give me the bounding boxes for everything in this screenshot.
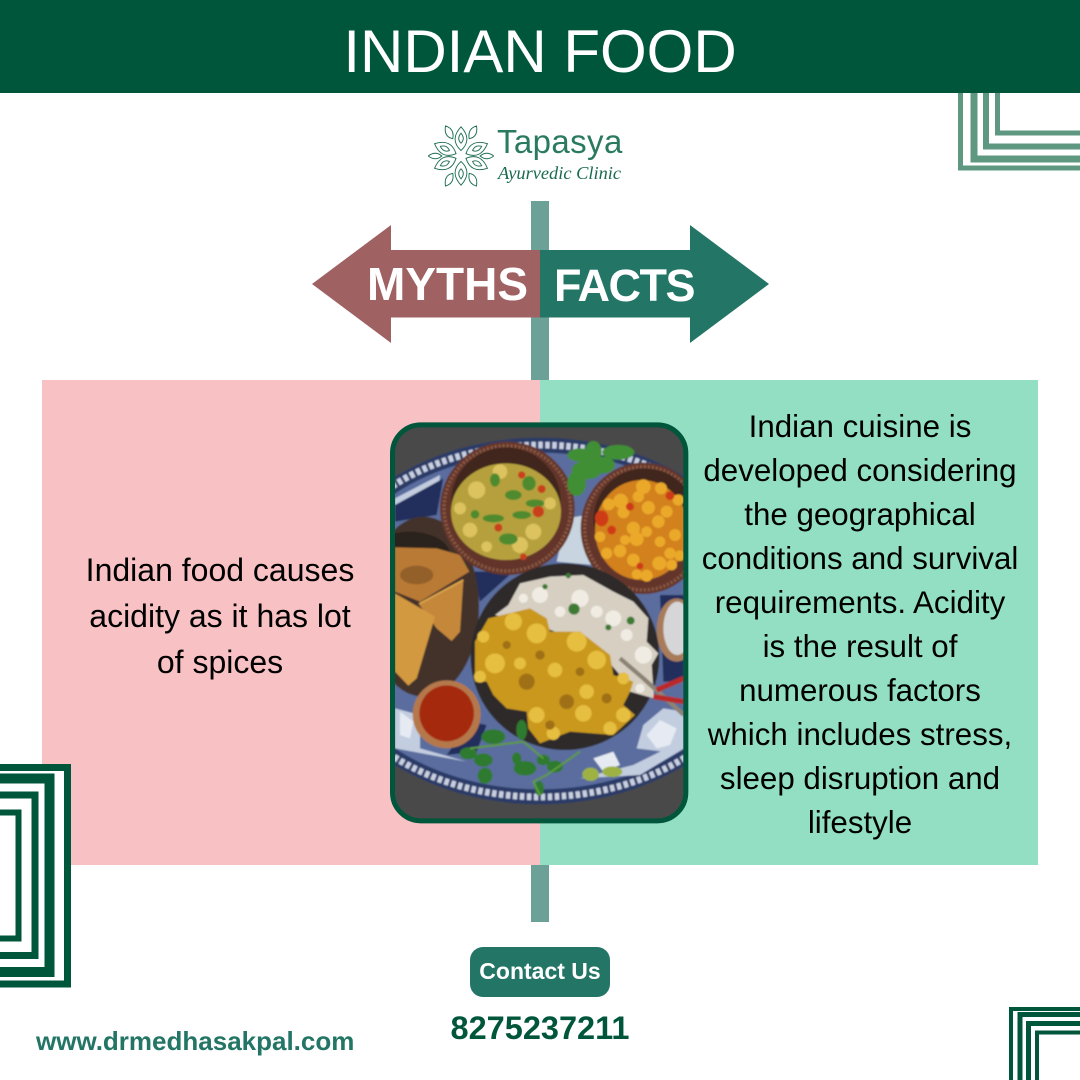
decorative corner lines: top right (958, 93, 1080, 170)
title banner (0, 0, 1080, 93)
title: INDIAN FOOD (343, 18, 737, 85)
myths label: MYTHS (367, 258, 528, 310)
fact text: which includes stress, (708, 717, 1012, 752)
logo name: Tapasya (497, 123, 623, 160)
decorative corner lines: bottom right (1009, 1007, 1080, 1080)
fact text: conditions and survival (702, 541, 1018, 576)
fact text: developed considering (703, 453, 1017, 488)
photo frame (392, 425, 686, 821)
logo subtitle: Ayurvedic Clinic (498, 163, 621, 183)
fact text: is the result of (763, 629, 957, 664)
myth text: acidity as it has lot (89, 598, 351, 634)
chili (653, 678, 684, 702)
phone number: 8275237211 (451, 1010, 629, 1046)
fact text: the geographical (744, 497, 976, 532)
samosa plate (395, 516, 480, 697)
icon: lotus flower (428, 125, 494, 187)
fact text: Indian cuisine is (749, 409, 971, 444)
myth text: of spices (157, 644, 283, 680)
fact text: sleep disruption and (720, 761, 1000, 796)
yellow curry (475, 608, 635, 743)
myth text: Indian food causes (86, 552, 354, 588)
website: www.drmedhasakpal.com (36, 1026, 354, 1056)
facts label: FACTS (554, 260, 694, 311)
contact label: Contact Us (479, 958, 601, 984)
logo: Tapasya Ayurvedic Clinic (428, 123, 623, 187)
myth text (86, 552, 354, 680)
fact text: numerous factors (739, 673, 981, 708)
food photo (390, 422, 688, 824)
spice bowl (413, 680, 481, 748)
salt bowl (656, 597, 684, 663)
panel: fact background (540, 380, 1038, 865)
center dark plate (471, 563, 659, 750)
panel: myth background (42, 380, 540, 865)
bowl: vegetable curry (440, 442, 575, 575)
center post upper (531, 201, 549, 380)
herbs bottom (460, 720, 563, 796)
fact text: lifestyle (808, 805, 912, 840)
arrow: facts (540, 225, 769, 343)
fact text: requirements. Acidity (715, 585, 1005, 620)
rice (495, 575, 658, 698)
plate (395, 437, 684, 805)
fact text (702, 409, 1018, 840)
decorative corner lines: left (0, 764, 71, 988)
contact button (470, 947, 610, 997)
center post lower (531, 865, 549, 922)
arrow: myths (312, 225, 540, 343)
samosas (395, 547, 469, 602)
fork (620, 658, 684, 715)
bowl: chickpeas (580, 462, 684, 595)
herbs top (567, 441, 634, 496)
